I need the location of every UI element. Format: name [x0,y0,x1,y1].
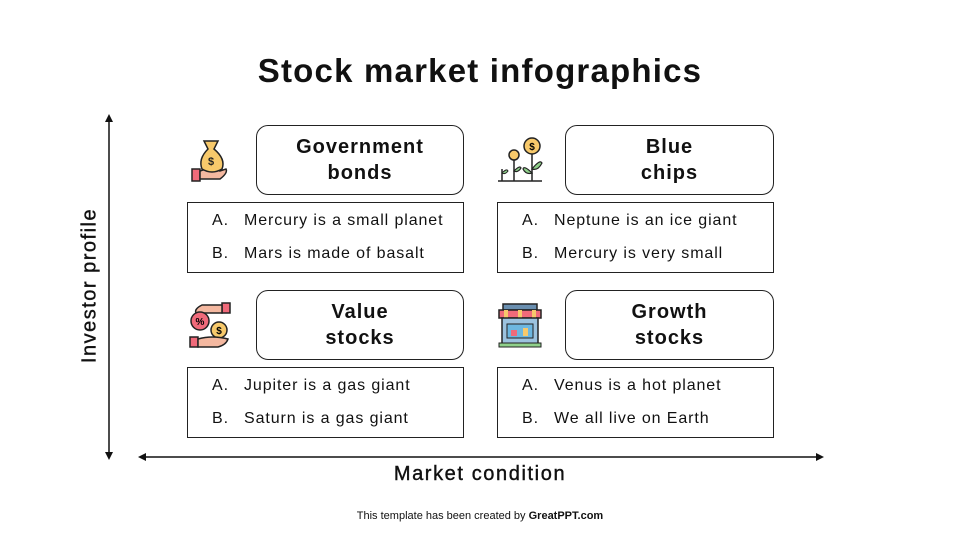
panel: blue chips list [497,202,774,273]
panel: growth stocks heading: stocks [635,327,704,349]
panel: government bonds list: A. [212,212,229,229]
panel: government bonds list: B. [212,245,229,262]
x axis label: Market condition [394,463,566,485]
icon: money bag: $ [208,156,214,168]
icon: exchange hands: $ [216,326,222,337]
panel: blue chips list: Mercury is very small [554,245,723,262]
panel: value stocks list [187,367,464,438]
panel: blue chips list: A. [522,212,539,229]
panel: government bonds heading: Government [296,136,424,158]
panel: growth stocks list [497,367,774,438]
icon: plants: $ [529,142,535,153]
icon: exchange hands [189,302,231,348]
icon: plants [498,137,543,182]
panel: blue chips heading [565,125,774,195]
title: Stock market infographics [258,52,702,89]
panel: value stocks heading: Value [331,301,389,323]
panel: blue chips heading: chips [641,162,698,184]
panel: growth stocks list: B. [522,410,539,427]
panel: government bonds heading: bonds [328,162,392,184]
panel: government bonds heading [256,125,464,195]
footer: This template has been created by GreatPPT.com [357,510,603,522]
panel: value stocks list: B. [212,410,229,427]
icon: money bag [191,140,228,182]
panel: government bonds list: Mercury is a small planet [244,212,443,229]
panel: value stocks list: A. [212,377,229,394]
panel: value stocks list: Saturn is a gas giant [244,410,409,427]
icon: exchange hands: % [196,317,205,328]
panel: government bonds list [187,202,464,273]
panel: blue chips list: B. [522,245,539,262]
panel: government bonds list: Mars is made of basalt [244,245,425,262]
panel: growth stocks list: Venus is a hot planet [554,377,721,394]
panel: growth stocks list: A. [522,377,539,394]
panel: value stocks heading [256,290,464,360]
axis: vertical arrow [105,114,113,460]
axis: horizontal arrow [138,453,824,461]
y axis label: Investor profile [78,208,100,363]
panel: growth stocks list: We all live on Earth [554,410,710,427]
panel: growth stocks heading: Growth [632,301,708,323]
panel: growth stocks heading [565,290,774,360]
icon: shop [498,303,542,348]
panel: value stocks heading: stocks [325,327,395,349]
panel: blue chips list: Neptune is an ice giant [554,212,737,229]
panel: blue chips heading: Blue [646,136,693,158]
panel: value stocks list: Jupiter is a gas giant [244,377,411,394]
